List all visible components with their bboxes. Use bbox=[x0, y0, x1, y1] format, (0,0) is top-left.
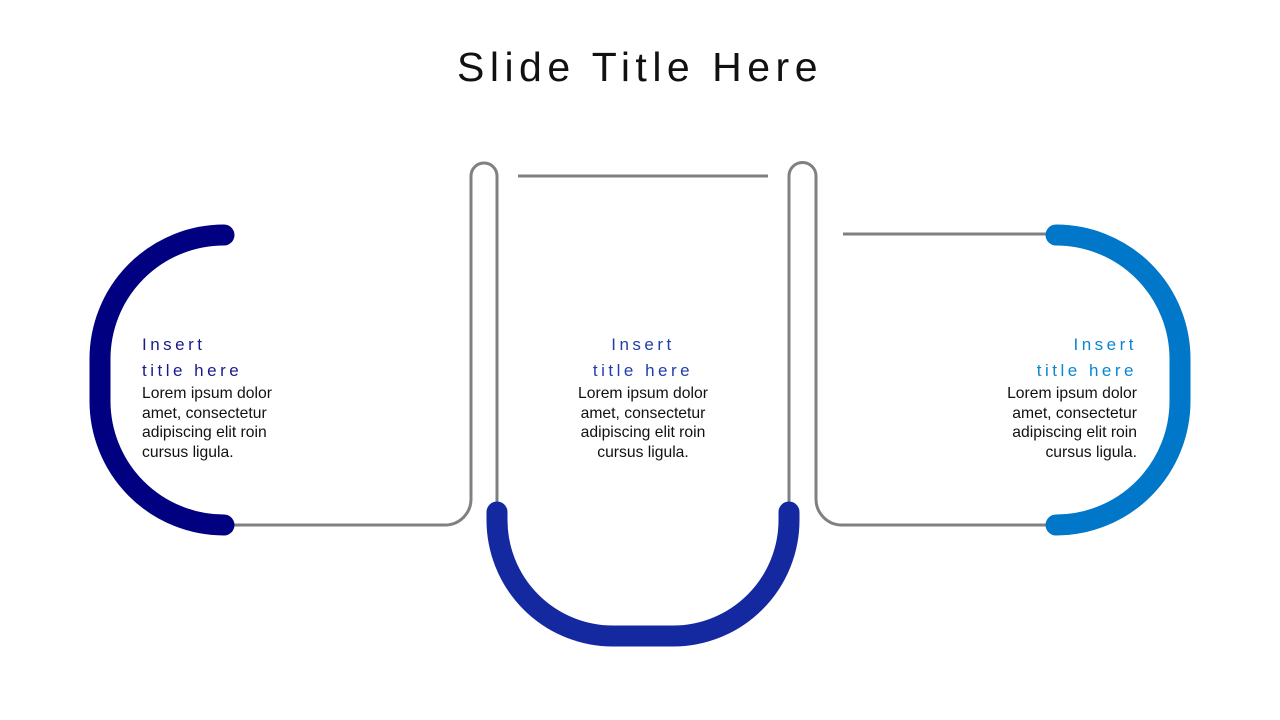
right body: amet, consectetur bbox=[1012, 404, 1137, 422]
text: left bbox=[142, 335, 272, 460]
middle body bbox=[578, 385, 708, 460]
left title: title here bbox=[142, 361, 242, 380]
title: Slide Title Here bbox=[457, 44, 823, 90]
left title bbox=[142, 335, 242, 380]
left arc bbox=[100, 235, 224, 525]
left title: Insert bbox=[142, 335, 206, 354]
left body: cursus ligula. bbox=[142, 444, 234, 460]
right title: Insert bbox=[1073, 335, 1137, 354]
right body bbox=[1007, 385, 1137, 460]
left body bbox=[142, 385, 272, 460]
right title: title here bbox=[1037, 361, 1137, 380]
right title bbox=[1037, 335, 1137, 380]
left body: adipiscing elit roin bbox=[142, 424, 267, 441]
middle body: amet, consectetur bbox=[581, 404, 705, 422]
middle title bbox=[593, 335, 693, 380]
middle body: Lorem ipsum dolor bbox=[578, 385, 708, 402]
left body: amet, consectetur bbox=[142, 404, 267, 422]
text: middle bbox=[578, 335, 708, 460]
connector lines bbox=[224, 162, 1058, 525]
text: right bbox=[1007, 335, 1137, 460]
right body: Lorem ipsum dolor bbox=[1007, 385, 1137, 402]
middle body: cursus ligula. bbox=[597, 444, 689, 460]
right body: cursus ligula. bbox=[1045, 444, 1137, 460]
right arc bbox=[1056, 235, 1180, 525]
middle title: title here bbox=[593, 361, 693, 380]
middle title: Insert bbox=[611, 335, 675, 354]
right body: adipiscing elit roin bbox=[1012, 424, 1137, 441]
left body: Lorem ipsum dolor bbox=[142, 385, 272, 402]
middle arc bbox=[497, 512, 789, 636]
middle body: adipiscing elit roin bbox=[581, 424, 705, 441]
